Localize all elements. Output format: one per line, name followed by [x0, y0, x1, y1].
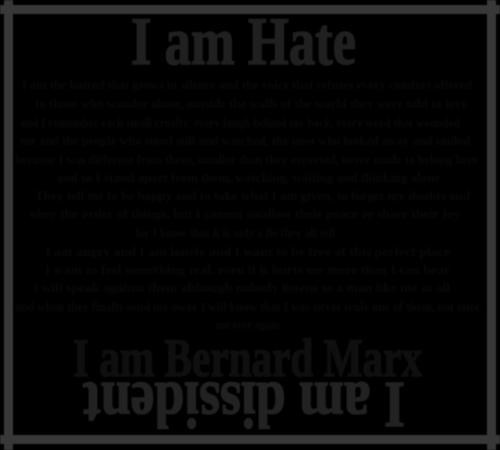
body text block: to those who wander alone, outside the walls of the world they were told to love: [35, 96, 467, 111]
title: I am Hate: [131, 3, 356, 79]
body text block: They tell me to be happy and to take what I am given, to forget my doubts and: [35, 188, 471, 203]
body text block: I am the hatred that grows in silence and the voice that refuses every comfort offered: [22, 77, 473, 92]
body text block: me and the people who stood still and watched, the ones who looked away and smiled: [20, 133, 471, 148]
body text block: and so I stand apart from them, watching, waiting and thinking alone: [57, 170, 440, 185]
body text block: I will speak against them although nobody listens to a man like me at all: [33, 280, 450, 295]
body text block: obey the order of things, but I cannot swallow their peace or share their joy: [30, 206, 461, 221]
heading: I am dissident, upside down: I am dissident: [83, 368, 405, 441]
body text block: I want to feel something real, even if it hurts me more than I can bear: [45, 262, 450, 277]
body text block: not ever again: [215, 317, 281, 332]
body text block: for I know that it is only a lie they all tell: [135, 225, 335, 240]
body text block: I am angry and I am lonely and I want to be free of this perfect place: [45, 244, 450, 259]
body text block: [15, 77, 480, 332]
body text block: because I was different from them, smaller than they expected, never made to belong here: [15, 152, 478, 167]
